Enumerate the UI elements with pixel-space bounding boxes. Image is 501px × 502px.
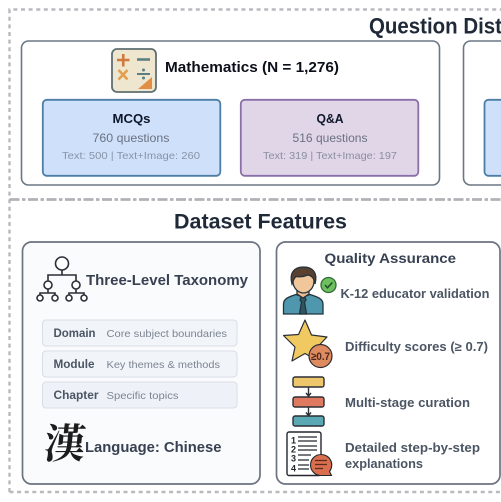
icon: Chinese character: 漢 xyxy=(42,411,89,470)
icon: flow stages xyxy=(293,377,324,426)
label: step-by-step explanations: explanations xyxy=(345,457,423,471)
card: MCQs: 760 questions xyxy=(92,131,170,145)
row: domain: Domain xyxy=(54,328,96,340)
icon: star with badge: ≥0.7 xyxy=(311,351,330,363)
card: MCQs: MCQs xyxy=(112,112,151,126)
panel: taxonomy and language xyxy=(22,242,260,484)
label: language: Language: Chinese xyxy=(85,440,222,456)
label: difficulty scores: Difficulty scores (≥ 0.7) xyxy=(345,340,488,354)
label: step-by-step explanations xyxy=(345,441,480,471)
icon: numbered document xyxy=(287,432,332,476)
card: MCQs: Text: 500 | Text+Image: 260 xyxy=(62,150,200,162)
card: Q&A xyxy=(241,100,418,176)
icon: numbered document: 3 xyxy=(291,454,296,464)
label: multi-stage curation: Multi-stage curation xyxy=(345,396,470,410)
card: Q&A: Text: 319 | Text+Image: 197 xyxy=(263,150,397,162)
card: Q&A: 516 questions xyxy=(292,131,368,145)
card: Q&A: Q&A xyxy=(316,112,344,126)
panel: quality assurance xyxy=(276,242,500,484)
label: educator validation: K-12 educator validation xyxy=(340,287,490,301)
heading: mathematics: Mathematics (N = 1,276) xyxy=(165,59,339,76)
panel: second subject (cropped) xyxy=(464,41,501,185)
heading: quality assurance: Quality Assurance xyxy=(324,250,456,266)
icon: numbered document: 2 xyxy=(291,444,296,454)
row: domain xyxy=(42,320,237,346)
heading: three-level taxonomy: Three-Level Taxonomy xyxy=(86,273,248,289)
icon: taxonomy tree xyxy=(37,257,87,301)
heading: dataset features: Dataset Features xyxy=(174,210,347,234)
icon: maths symbols xyxy=(112,49,156,92)
row: chapter: Chapter xyxy=(54,390,99,402)
row: module: Key themes & methods xyxy=(106,359,220,371)
card: MCQs xyxy=(43,100,220,176)
row: domain: Core subject boundaries xyxy=(106,328,227,340)
row: module: Module xyxy=(54,359,94,371)
icon: star with badge xyxy=(284,320,332,368)
icon: numbered document: 1 xyxy=(291,436,296,446)
label: step-by-step explanations: Detailed step-by-step xyxy=(345,441,480,455)
row: module xyxy=(42,351,237,377)
icon: educator with check xyxy=(284,267,336,314)
row: chapter: Specific topics xyxy=(106,390,178,402)
row: chapter xyxy=(42,382,237,408)
panel: mathematics xyxy=(22,41,440,185)
icon: numbered document: 4 xyxy=(291,464,296,474)
